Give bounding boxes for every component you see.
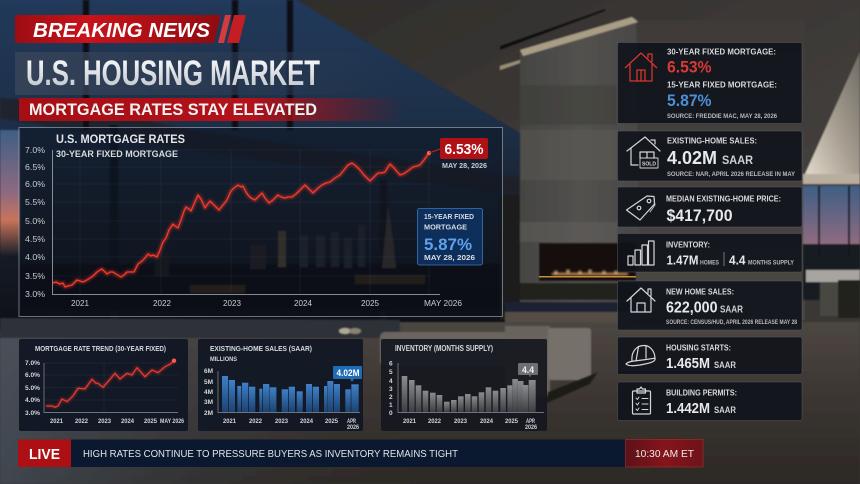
x axis labels: 2024 [294,299,313,308]
panel: existing-home sales [198,339,363,431]
months supply value: 4.4 [729,252,746,268]
inventory y axis: 3 [389,386,393,393]
trend y axis: 6.0% [25,372,40,379]
x axis labels: 2021 [71,299,90,308]
15-year value: 5.87% [667,91,712,110]
trend heading: MORTGAGE RATE TREND (30-YEAR FIXED) [35,346,166,353]
time badge: 10:30 AM ET [635,449,694,460]
icon: red house [625,53,657,81]
sales callout [333,366,362,382]
sales y axis: 6M [204,368,213,375]
trend x axis: 2025 [144,418,157,425]
panel: new home sales card [618,281,802,330]
trend y axis: 4.0% [25,397,40,404]
sales heading: EXISTING-HOME SALES (SAAR) [210,344,312,353]
callout: 15-year rate: 15-YEAR FIXED [424,214,474,221]
sales label: EXISTING-HOME SALES: [667,136,757,146]
trend x axis: MAY 2026 [160,418,184,425]
source: NAR: SOURCE: NAR, APRIL 2026 RELEASE IN MAY [667,172,795,178]
price label: MEDIAN EXISTING-HOME PRICE: [666,194,781,204]
subtitle band [19,98,404,121]
panel: housing starts card [618,337,802,374]
news ticker [18,440,703,467]
callout: 15-year rate: MAY 28, 2026 [424,255,475,262]
new home value: 622,000 [666,300,718,316]
sales y axis: 3M [204,399,213,406]
trend x axis: 2021 [50,418,63,425]
sales bars [222,376,359,412]
30-year label: 30-YEAR FIXED MORTGAGE: [667,46,776,56]
x axis labels: 2025 [361,299,380,308]
sales y axis: 2M [204,410,213,417]
y axis labels: 5.0% [25,217,45,226]
callout: 30-year rate [440,138,488,170]
y axis labels: 6.5% [25,163,45,172]
inventory homes value: 1.47M [666,252,698,268]
sales x axis: 2026 [347,424,359,431]
icon: sold house [627,137,660,168]
inventory x axis: 2022 [428,418,441,425]
chart heading: U.S. MORTGAGE RATES [56,132,185,146]
sales unit: SAAR [722,153,753,167]
trend y axis: 5.0% [25,385,40,392]
months supply unit: MONTHS SUPPLY [748,260,794,266]
panel: mortgage rate trend [19,339,188,431]
trend x axis [50,418,184,425]
inventory homes unit: HOMES [700,260,719,266]
y axis labels: 4.5% [25,235,45,244]
inventory x axis: 2024 [480,418,493,425]
y axis labels: 5.5% [25,198,45,207]
15-year label: 15-YEAR FIXED MORTGAGE: [667,80,777,90]
y axis labels [25,146,45,299]
icon: house [627,288,655,312]
live badge [18,440,71,467]
callout: 30-year rate: 6.53% [444,142,484,158]
skyline [20,205,500,310]
inventory y axis: 1 [389,402,393,409]
trend y axis: 3.0% [25,410,40,417]
inventory callout: 4.4 [522,365,535,376]
inventory x axis [403,418,537,431]
callout: 15-year rate: MORTGAGE [424,224,467,232]
panel: main mortgage rate chart [19,128,502,316]
inventory heading: INVENTORY (MONTHS SUPPLY) [395,344,493,353]
x axis labels: 2023 [223,299,242,308]
inventory y axis: 2 [389,394,393,401]
x axis labels: MAY 2026 [424,299,463,308]
inventory y axis: 0 [389,410,393,417]
icon: price tag [626,196,655,220]
inventory bars [402,376,536,412]
inventory x axis: 2021 [403,418,416,425]
x axis labels [71,299,463,308]
permits value: 1.442M [666,401,710,417]
sales subheading: MILLIONS [210,356,238,363]
y axis labels: 3.0% [25,290,45,299]
new home unit: SAAR [720,304,744,316]
starts unit: SAAR [714,360,736,371]
x axis labels: 2022 [153,299,172,308]
icon: clipboard [632,387,650,414]
sales x axis: 2025 [325,418,338,425]
inventory x axis: APR [526,418,535,425]
icon: hard hat [626,346,655,366]
source: Census/HUD: SOURCE: CENSUS/HUD, APRIL 2026 RELEASE MAY 28 [666,320,798,326]
trend x axis: 2023 [98,418,111,425]
sales y axis: 5M [204,379,213,386]
callout: 30-year rate: MAY 28, 2026 [442,163,487,170]
ticker headline: HIGH RATES CONTINUE TO PRESSURE BUYERS AS INVENTORY REMAINS TIGHT [83,448,459,460]
y axis labels: 7.0% [25,146,45,155]
icon: sold house: SOLD [642,162,656,168]
sales y axis: 4M [204,389,213,396]
price value: $417,700 [666,206,732,225]
breaking news banner: BREAKING NEWS [33,20,211,42]
trend y axis [25,360,40,417]
starts label: HOUSING STARTS: [666,342,731,352]
live badge: LIVE [29,446,60,463]
sales x axis [223,418,359,431]
inventory x axis: 2026 [525,424,537,431]
inventory x axis: 2023 [454,418,467,425]
30-year rate line [53,149,440,287]
sales callout: 4.02M [336,368,360,379]
starts value: 1.465M [666,356,710,372]
trend y axis: 7.0% [25,360,40,367]
inventory y axis: 5 [389,369,393,376]
sales y axis [204,368,213,417]
subtitle band: MORTGAGE RATES STAY ELEVATED [29,100,317,119]
panel: mortgage rates card [618,42,802,124]
callout: 15-year rate: 5.87% [424,236,472,254]
sales x axis: 2024 [300,418,313,425]
permits label: BUILDING PERMITS: [666,388,737,398]
inventory y axis: 6 [389,360,393,368]
sales x axis: 2023 [275,418,288,425]
sales value: 4.02M [667,148,717,168]
inventory y axis: 4 [389,378,393,385]
chart subheading: 30-YEAR FIXED MORTGAGE [56,149,178,159]
time badge [626,440,703,467]
inventory label: INVENTORY: [666,240,710,250]
y axis labels: 6.0% [25,180,45,189]
permits unit: SAAR [714,405,736,416]
trend line [46,358,176,407]
trend x axis: 2022 [75,418,88,425]
inventory y axis [389,360,393,417]
30-year value: 6.53% [667,58,712,76]
sales x axis: 2022 [249,418,262,425]
callout: 15-year rate [418,208,482,265]
sales x axis: 2021 [223,418,236,425]
inventory x axis: 2025 [505,418,518,425]
panel: building permits card [618,382,802,420]
breaking news banner [15,15,246,43]
y axis labels: 4.0% [25,253,45,262]
y axis labels: 3.5% [25,272,45,281]
icon: bars [628,241,654,265]
sales x axis: APR [347,418,356,425]
panel: inventory card [618,234,802,272]
trend x axis: 2024 [121,418,134,425]
title band: U.S. HOUSING MARKET [26,54,320,93]
source: Freddie Mac: SOURCE: FREDDIE MAC, MAY 28, 2026 [667,114,778,120]
inventory callout [518,363,538,378]
panel: existing-home sales card [618,131,802,181]
panel: median price card [618,187,802,227]
new home label: NEW HOME SALES: [666,286,734,296]
panel: inventory months supply [381,339,547,431]
